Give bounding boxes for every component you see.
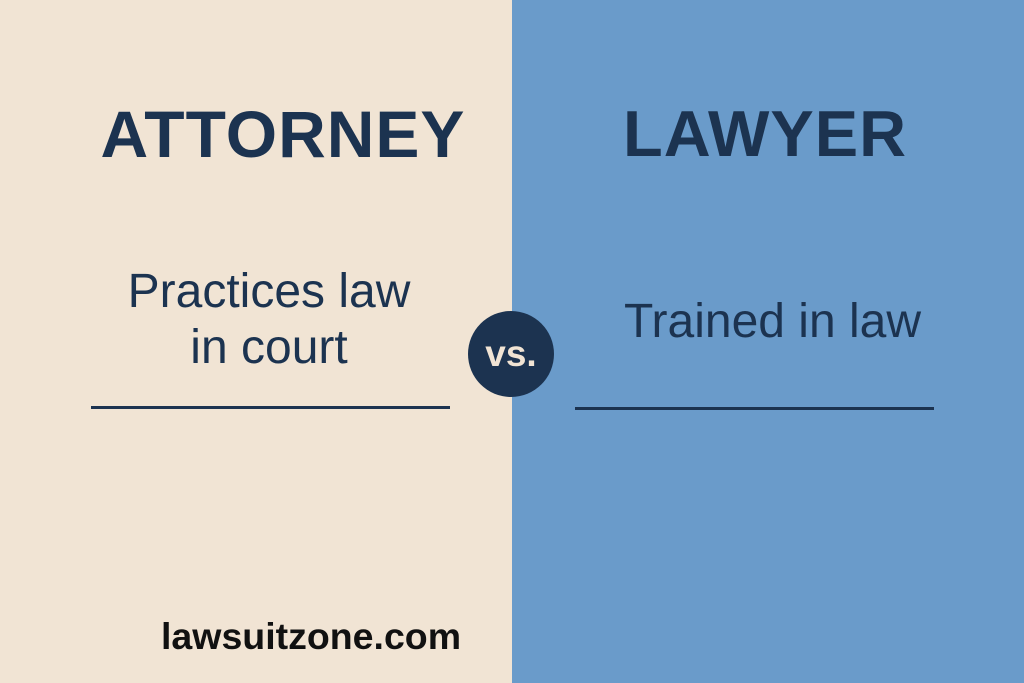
badge: vs: vs. — [485, 333, 537, 374]
text: trained in law: Trained in law — [624, 295, 921, 348]
underline — [91, 406, 450, 409]
text: practices law in court: Practices law — [128, 265, 410, 318]
underline — [575, 407, 934, 410]
text: practices law in court — [128, 265, 410, 374]
heading: attorney: ATTORNEY — [101, 97, 465, 171]
text: practices law in court: in court — [190, 321, 348, 374]
heading: lawyer: LAWYER — [623, 97, 907, 170]
panel: attorney — [0, 0, 512, 683]
panel: lawyer — [512, 0, 1024, 683]
footer: website: lawsuitzone.com — [161, 615, 461, 657]
badge: vs — [468, 311, 554, 397]
